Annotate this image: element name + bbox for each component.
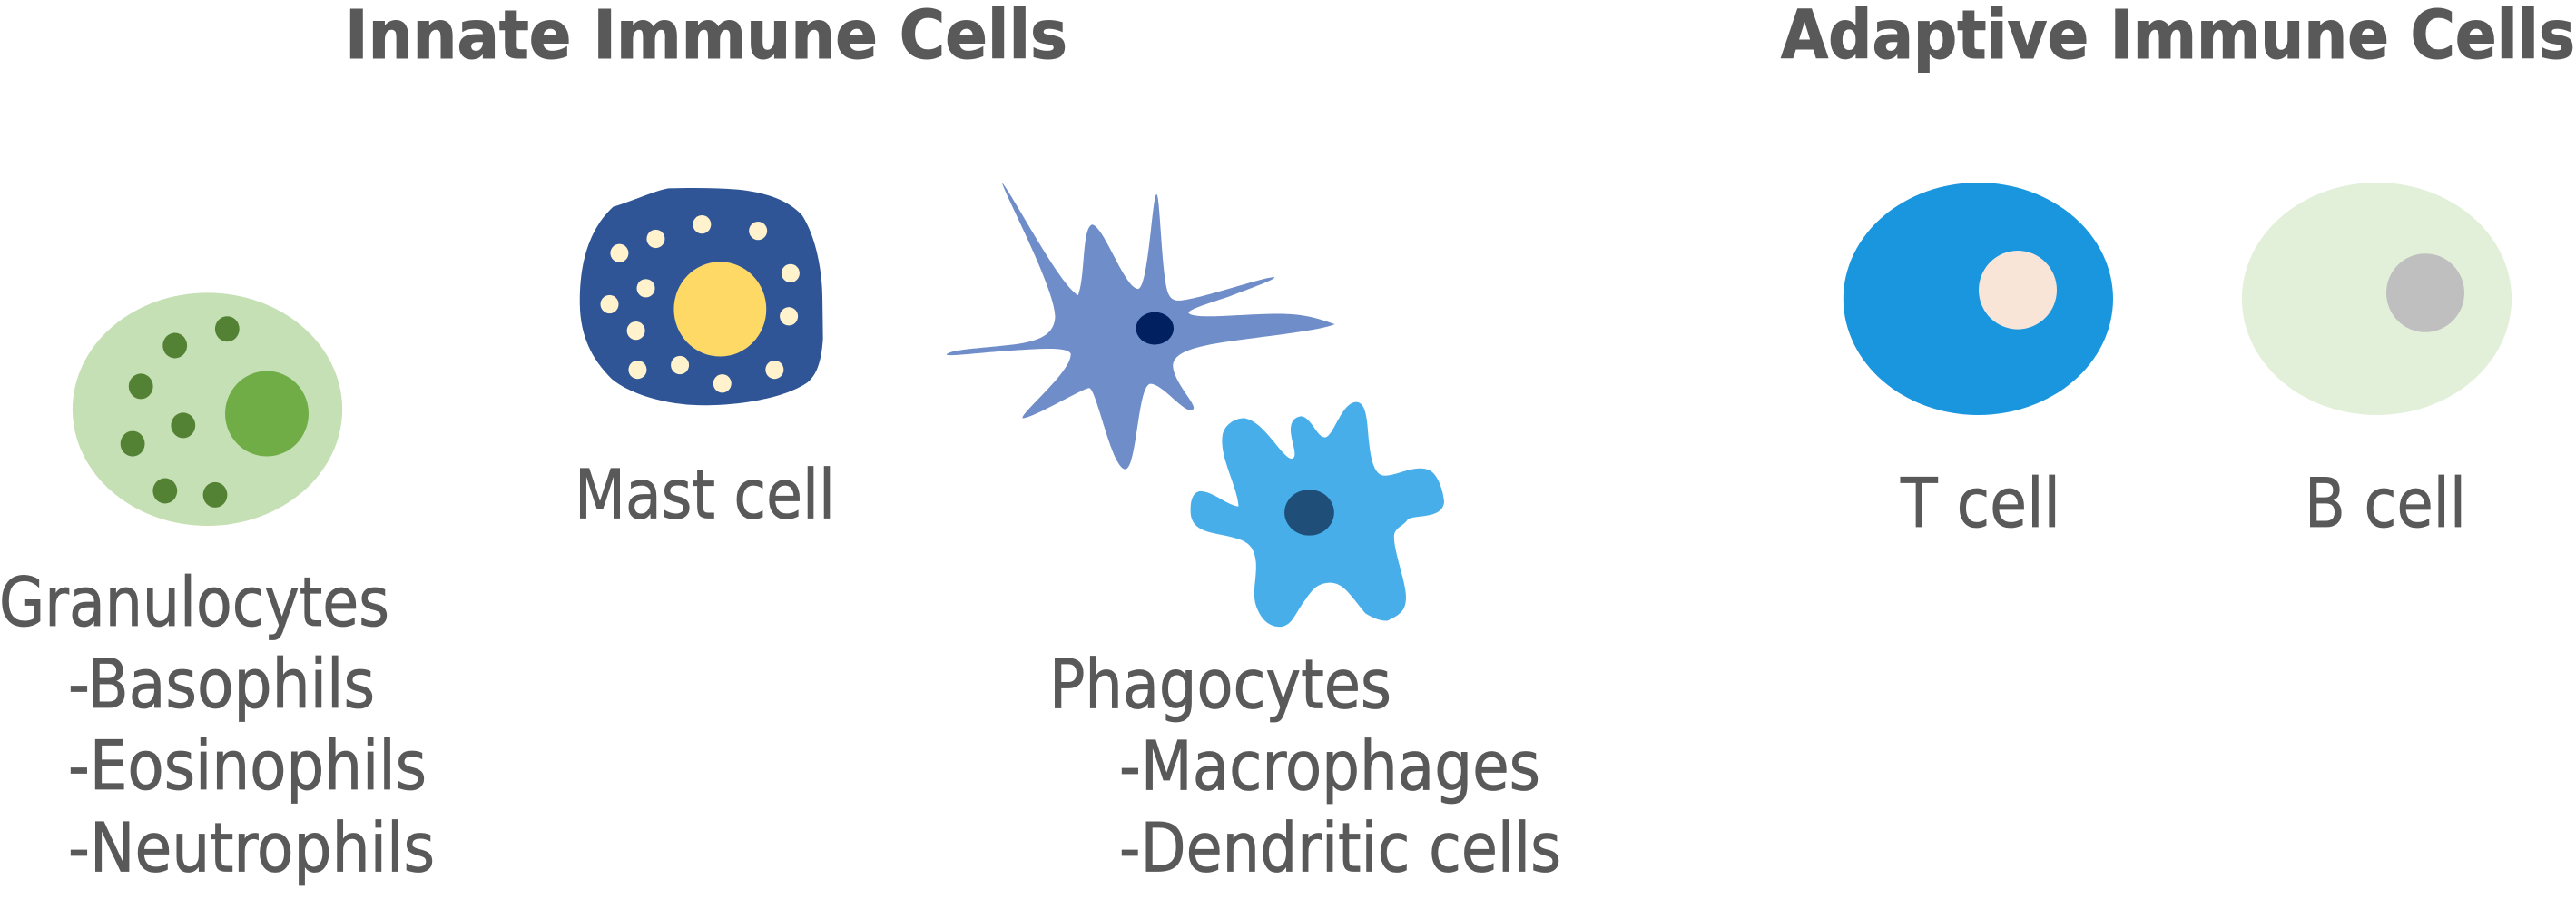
B cell body (2242, 183, 2512, 415)
icon: T cell (1844, 183, 2113, 415)
icon: B cell (2242, 183, 2512, 415)
text block: phagocytes list: -Dendritic cells (1119, 808, 1561, 887)
label: T cell: T cell (1900, 464, 2060, 543)
dendritic cell nucleus (1136, 312, 1174, 344)
text block: granulocytes list (0, 563, 435, 888)
text block: granulocytes list: Granulocytes (0, 563, 389, 642)
mast cell body (580, 188, 823, 405)
label: mast cell: Mast cell (575, 455, 835, 534)
text block: phagocytes list: Phagocytes (1049, 645, 1391, 724)
text block: phagocytes list: -Macrophages (1119, 727, 1540, 806)
mast cell granules (601, 215, 800, 392)
text block: phagocytes list (1049, 645, 1561, 887)
dendritic cell body (947, 183, 1335, 470)
T cell body (1844, 183, 2113, 415)
granulocyte granules (121, 316, 240, 508)
icon: granulocyte cell (73, 292, 342, 526)
macrophage body (1191, 402, 1444, 627)
macrophage nucleus (1284, 490, 1334, 536)
icon: mast cell (580, 188, 823, 405)
T cell nucleus (1979, 251, 2057, 330)
label: B cell: B cell (2305, 464, 2466, 543)
mast cell nucleus (673, 262, 766, 357)
icon: dendritic cell (947, 183, 1335, 470)
text block: granulocytes list: -Basophils (68, 645, 375, 724)
granulocyte body (73, 292, 342, 526)
B cell nucleus (2386, 253, 2464, 332)
granulocyte nucleus (225, 371, 309, 456)
icon: macrophage (1191, 402, 1444, 627)
text block: granulocytes list: -Neutrophils (68, 808, 435, 888)
text block: granulocytes list: -Eosinophils (68, 727, 427, 806)
